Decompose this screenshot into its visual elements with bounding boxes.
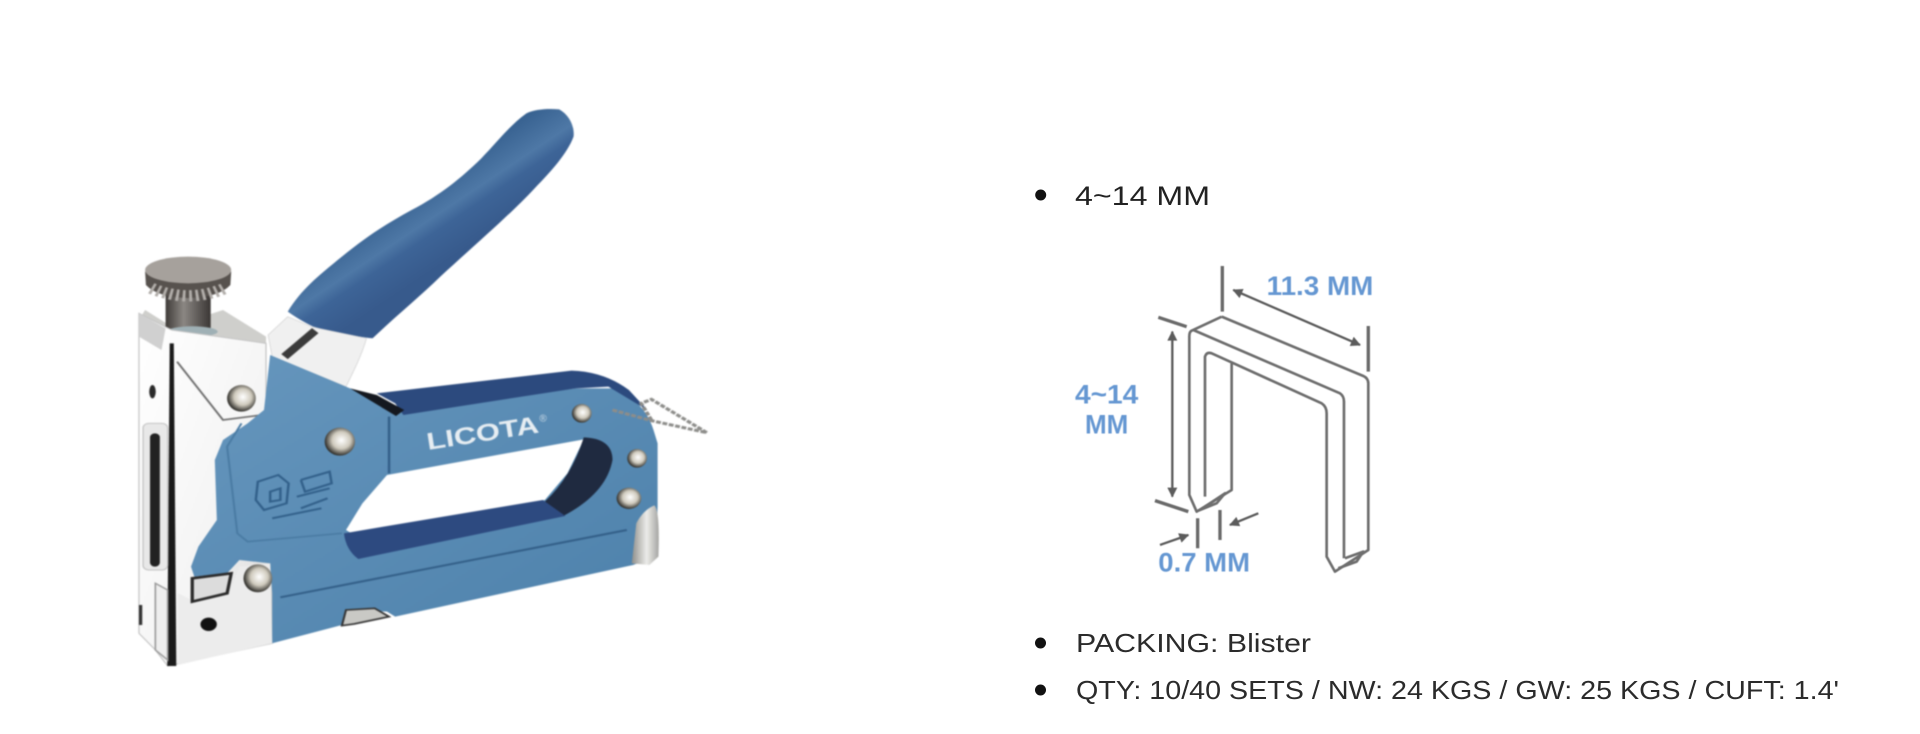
inner plate edge bbox=[177, 362, 262, 420]
dimension labels: 4~14 bbox=[1075, 379, 1139, 409]
spec list: packing and quantity bbox=[1035, 628, 1839, 705]
quantity bullet bbox=[1035, 684, 1046, 696]
handle and knob bbox=[139, 109, 574, 387]
icon: stapler product photo bbox=[139, 109, 707, 666]
body seams bbox=[280, 417, 627, 597]
nose mark bbox=[139, 605, 142, 625]
top-left tag bbox=[139, 313, 166, 350]
blue rubber grip bbox=[288, 109, 574, 338]
packing bullet bbox=[1035, 638, 1046, 648]
magazine slot bbox=[150, 433, 160, 567]
neck dark stripe bbox=[284, 331, 315, 357]
chrome front column bbox=[139, 313, 272, 666]
chrome neck bbox=[268, 317, 366, 387]
end clip bbox=[632, 505, 659, 565]
magazine slot surround bbox=[143, 423, 168, 570]
staple outline bbox=[1189, 317, 1368, 572]
catch bbox=[192, 573, 231, 602]
bullet bbox=[1035, 190, 1046, 200]
packing text: PACKING: Blister bbox=[1076, 628, 1311, 658]
nose piece bbox=[155, 583, 168, 660]
quantity text: QTY: 10/40 SETS / NW: 24 KGS / GW: 25 KGS / CUFT: 1.4' bbox=[1076, 675, 1839, 705]
knob cap bbox=[145, 257, 231, 283]
wire ring bbox=[612, 399, 707, 433]
size text: 4~14 MM bbox=[1075, 181, 1210, 211]
stapler body bbox=[139, 313, 707, 666]
upper grip insert bbox=[377, 371, 647, 415]
dimension labels: MM bbox=[1085, 409, 1128, 439]
dimension labels: 0.7 MM bbox=[1158, 548, 1250, 578]
LICOTA brand mark: ® bbox=[539, 413, 548, 425]
lower grip insert bbox=[344, 500, 565, 559]
lower plate hole bbox=[200, 618, 217, 631]
top plate bbox=[139, 310, 266, 345]
knob stem bbox=[166, 292, 211, 330]
dimension labels: 11.3 MM bbox=[1267, 271, 1373, 301]
rivets bbox=[227, 385, 647, 592]
spec list: size bbox=[1035, 181, 1210, 211]
lower chrome plate bbox=[178, 563, 272, 665]
column hole bbox=[149, 385, 156, 398]
dimension ticks bbox=[1155, 266, 1368, 548]
blue body casting bbox=[191, 355, 658, 643]
dimension labels bbox=[1075, 271, 1373, 578]
knob washer bbox=[167, 326, 218, 337]
dimension arrows bbox=[1160, 290, 1360, 545]
handle opening bbox=[346, 439, 584, 535]
staple dimension diagram bbox=[1075, 266, 1373, 578]
black wedge bbox=[350, 388, 404, 416]
LICOTA brand mark bbox=[425, 410, 550, 456]
black vertical edge bbox=[167, 343, 176, 666]
knurl ridges bbox=[151, 288, 225, 296]
raised plate edge bbox=[227, 423, 342, 542]
embossed logo bbox=[256, 472, 332, 518]
inner dark rear of opening bbox=[545, 437, 612, 516]
LICOTA brand mark: LICOTA bbox=[425, 412, 541, 456]
knurled knob band bbox=[145, 272, 231, 298]
bottom slide tab bbox=[342, 608, 389, 626]
